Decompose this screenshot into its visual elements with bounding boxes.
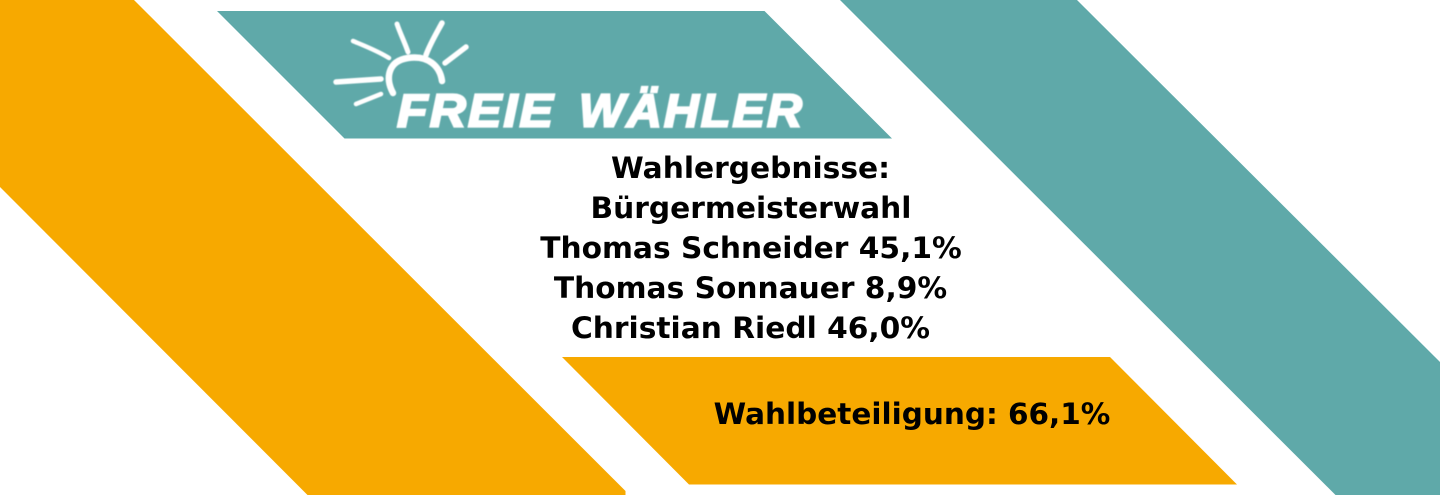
right teal diagonal band <box>840 0 1440 495</box>
text block: election results <box>540 150 962 345</box>
heading line 1: Wahlergebnisse: <box>611 150 890 185</box>
logo wordmark: WÄHLER: WÄHLER <box>579 84 804 136</box>
icon: sun <box>336 23 466 104</box>
logo: Freie Wähler <box>336 23 804 136</box>
heading line 2: Bürgermeisterwahl <box>591 190 911 225</box>
panel: logo banner <box>217 11 892 138</box>
result: Thomas Schneider: Thomas Schneider 45,1% <box>540 230 962 265</box>
turnout label: Wahlbeteiligung: 66,1% <box>714 397 1110 431</box>
result: Christian Riedl: Christian Riedl 46,0% <box>571 310 930 345</box>
result: Thomas Sonnauer: Thomas Sonnauer 8,9% <box>554 270 947 305</box>
logo wordmark: FREIE: FREIE <box>397 84 555 136</box>
panel: turnout <box>562 357 1237 484</box>
left orange diagonal band <box>0 0 626 495</box>
